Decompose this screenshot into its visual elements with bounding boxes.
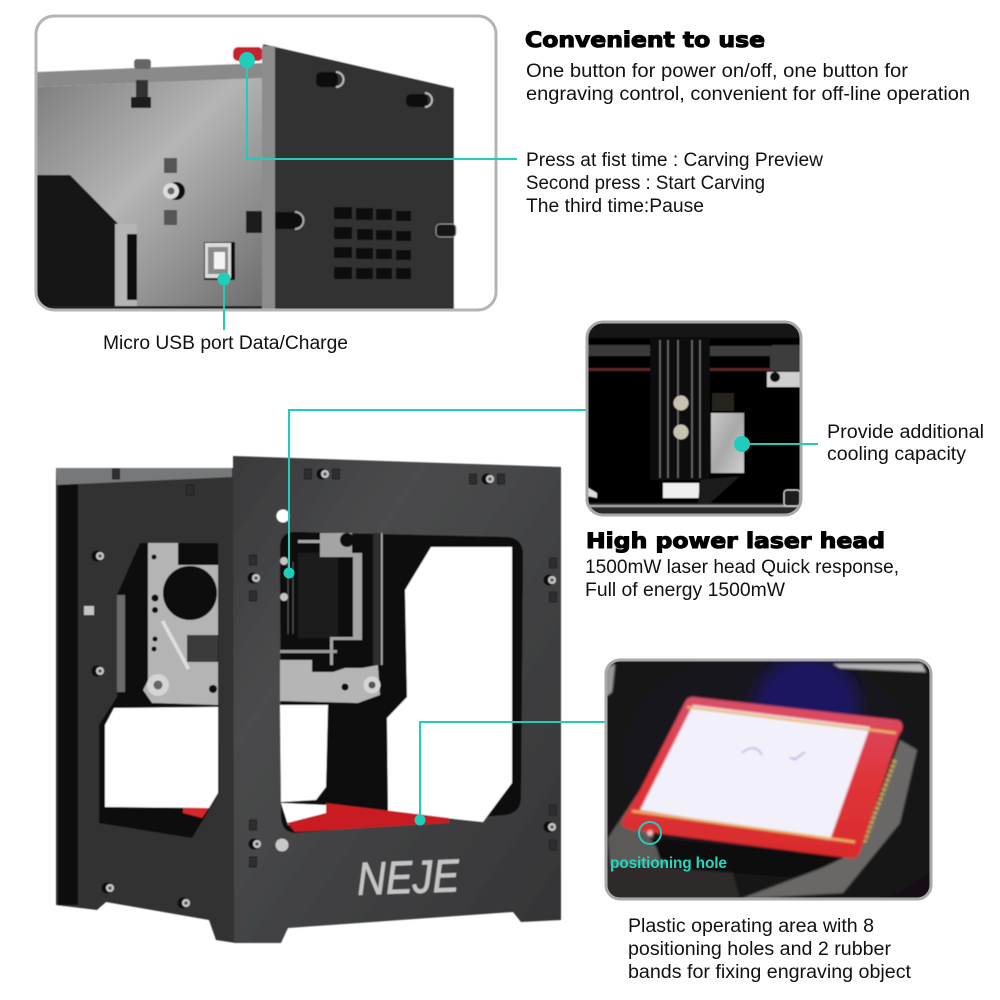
cut-out window in plate xyxy=(38,174,118,307)
heading: high power laser head: High power laser head xyxy=(586,529,885,553)
side wall screws xyxy=(316,72,338,87)
logo: NEJE: NEJE xyxy=(356,849,461,905)
engraved marks xyxy=(742,748,805,760)
side wall xyxy=(263,44,454,311)
positioning hole ring xyxy=(639,822,661,844)
gray back plate xyxy=(36,78,262,311)
toothed edge xyxy=(117,595,125,692)
connector: laser head callout line xyxy=(284,410,586,578)
white paper xyxy=(640,705,870,840)
front window interior xyxy=(280,532,523,833)
window screws xyxy=(280,557,288,601)
window cut-out white right xyxy=(387,547,512,822)
connector: button callout line xyxy=(239,52,517,159)
USB port xyxy=(204,242,235,280)
label: positioning hole: positioning hole xyxy=(610,855,727,872)
mechanism inside front window xyxy=(280,533,383,703)
text: convenience description: One button for power on/off, one button for xyxy=(526,61,909,82)
connector: work plate callout line xyxy=(414,722,606,826)
under-plate shadow xyxy=(650,837,837,878)
left window interior xyxy=(99,543,219,838)
rubber bands xyxy=(632,707,896,842)
top and left gleam xyxy=(833,664,926,672)
left mechanism plate xyxy=(143,543,218,705)
red work plate xyxy=(287,803,449,832)
text: cooling label: cooling capacity xyxy=(827,444,966,465)
panel: button and USB photo xyxy=(36,16,496,311)
text: button press functions: Press at fist time : Carving Preview xyxy=(526,150,823,171)
text: laser head description: 1500mW laser head Quick response, xyxy=(585,557,899,578)
heat sink xyxy=(650,337,710,480)
frame slots xyxy=(250,555,256,565)
silver cooling block xyxy=(711,413,744,473)
text: convenience description xyxy=(526,61,970,105)
red power button xyxy=(233,47,263,61)
window cut-out white lower left xyxy=(280,705,328,802)
heading: convenient to use: Convenient to use xyxy=(525,28,765,52)
front frame screws xyxy=(316,468,329,480)
text: button press functions: The third time:Pause xyxy=(526,196,704,217)
connector: cooling callout line xyxy=(734,436,818,452)
text: button press functions: Second press : Start Carving xyxy=(526,173,765,194)
text: USB port label: Micro USB port Data/Charge xyxy=(103,333,348,354)
red plate xyxy=(622,697,902,858)
slots and screw on plate xyxy=(164,158,177,173)
heat sink screws xyxy=(674,396,688,410)
panel: laser head photo xyxy=(587,322,802,515)
text: cooling label xyxy=(827,422,984,465)
contact pins xyxy=(864,760,895,843)
text: operating area description: positioning holes and 2 rubber xyxy=(628,939,892,960)
product: engraver main image xyxy=(56,456,561,943)
left side face xyxy=(56,468,236,943)
top edge of plate xyxy=(36,63,262,87)
text: laser head description xyxy=(585,557,899,601)
lower-left metal base xyxy=(608,793,669,867)
text: button press functions xyxy=(526,150,823,217)
text: operating area description: Plastic operating area with 8 xyxy=(628,916,874,937)
standoff screw on top edge xyxy=(134,59,151,69)
connector: USB callout line xyxy=(218,272,230,330)
text: convenience description: engraving control, convenient for off-line operation xyxy=(526,84,970,105)
right metal base xyxy=(740,740,917,899)
vent grid xyxy=(334,207,411,279)
text: operating area description: bands for fixing engraving object xyxy=(628,962,912,983)
side frame screws xyxy=(92,550,104,562)
frame holes xyxy=(276,510,290,522)
front face xyxy=(233,456,561,943)
text: laser head description: Full of energy 1500mW xyxy=(585,580,785,601)
text: cooling label: Provide additional xyxy=(827,422,984,443)
panel: operating area photo xyxy=(606,655,931,899)
ribbon connector xyxy=(663,483,699,498)
text: operating area description xyxy=(628,916,912,983)
